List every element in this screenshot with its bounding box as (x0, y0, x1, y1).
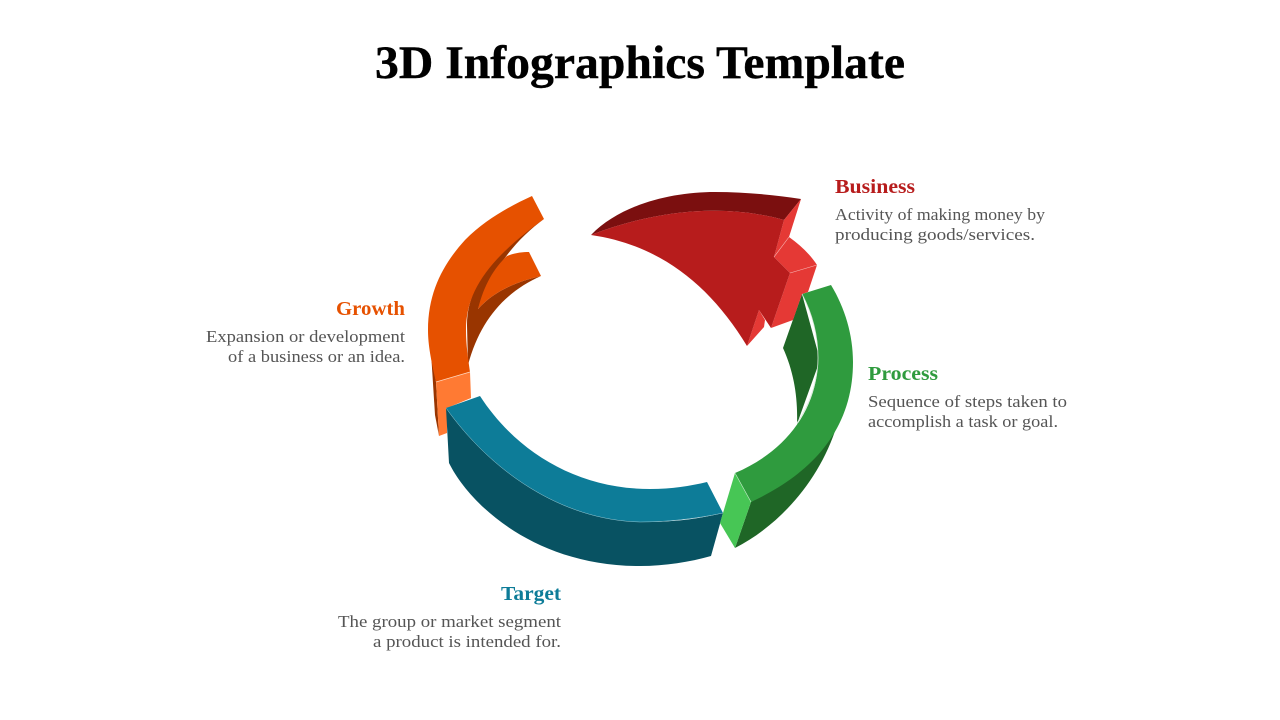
label: target: a product is intended for. (373, 632, 561, 651)
label: growth (206, 298, 405, 366)
ring diagram (428, 192, 853, 566)
label: process: Sequence of steps taken to (868, 392, 1067, 411)
label: process: Process (868, 363, 938, 385)
label: target: Target (501, 583, 561, 605)
label: business (835, 176, 1046, 244)
arrow segment: growth (orange) (428, 196, 544, 436)
label: business: producing goods/services. (835, 225, 1035, 244)
label: business: Activity of making money by (835, 205, 1046, 224)
arrow segment: target (teal) (446, 396, 723, 566)
label: growth: Growth (336, 298, 405, 320)
arrow segment: process (green) (720, 285, 853, 548)
label: target: The group or market segment (338, 612, 561, 631)
arrow segment: business (red) (591, 192, 817, 346)
label: growth: Expansion or development (206, 327, 405, 346)
label: process: accomplish a task or goal. (868, 412, 1058, 431)
label: process (868, 363, 1067, 431)
label: target (338, 583, 561, 651)
label: growth: of a business or an idea. (228, 347, 405, 366)
title: 3D Infographics Template (375, 37, 905, 89)
label: business: Business (835, 176, 915, 198)
